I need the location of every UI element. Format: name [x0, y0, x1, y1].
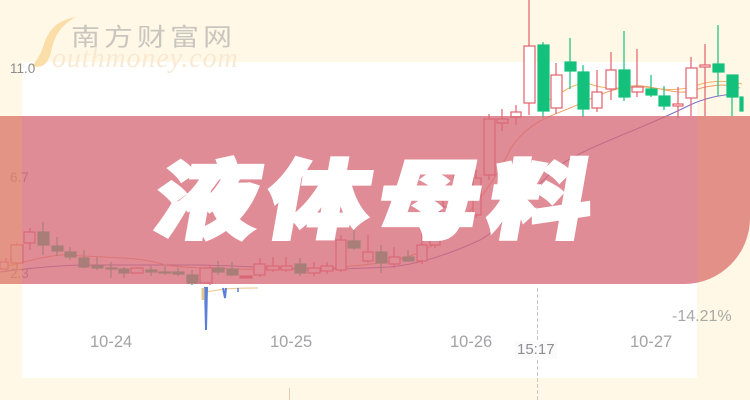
date 10-24: 10-24: [90, 333, 132, 351]
small tick: [288, 388, 290, 400]
volume spikes: [203, 287, 238, 330]
label 6.7: 6.7: [10, 170, 29, 185]
date 10-25: 10-25: [270, 333, 312, 351]
white chart panel: [22, 62, 697, 378]
watermark latin url: outhmoney.com: [52, 43, 239, 74]
change -14.21%: -14.21%: [672, 308, 732, 325]
banner band: [0, 116, 750, 284]
moving averages: [0, 81, 742, 292]
left tint: [0, 116, 22, 284]
title: 液体母料: [147, 133, 613, 256]
date 10-27: 10-27: [630, 333, 672, 351]
watermark chinese name: 南方财富网: [71, 18, 236, 53]
label 11.0: 11.0: [10, 61, 35, 76]
y axis labels: [10, 61, 35, 281]
rising candles: [0, 0, 710, 285]
watermark: southmoney logo: [32, 17, 239, 74]
x axis labels: [90, 308, 732, 358]
right tint: [697, 116, 750, 284]
crosshair time 15:17: 15:17: [517, 341, 555, 358]
icon: swoosh S: [32, 17, 76, 67]
crosshair line: [536, 288, 538, 400]
date 10-26: 10-26: [450, 333, 492, 351]
label 2.3: 2.3: [10, 266, 29, 281]
falling candles: [38, 25, 743, 285]
